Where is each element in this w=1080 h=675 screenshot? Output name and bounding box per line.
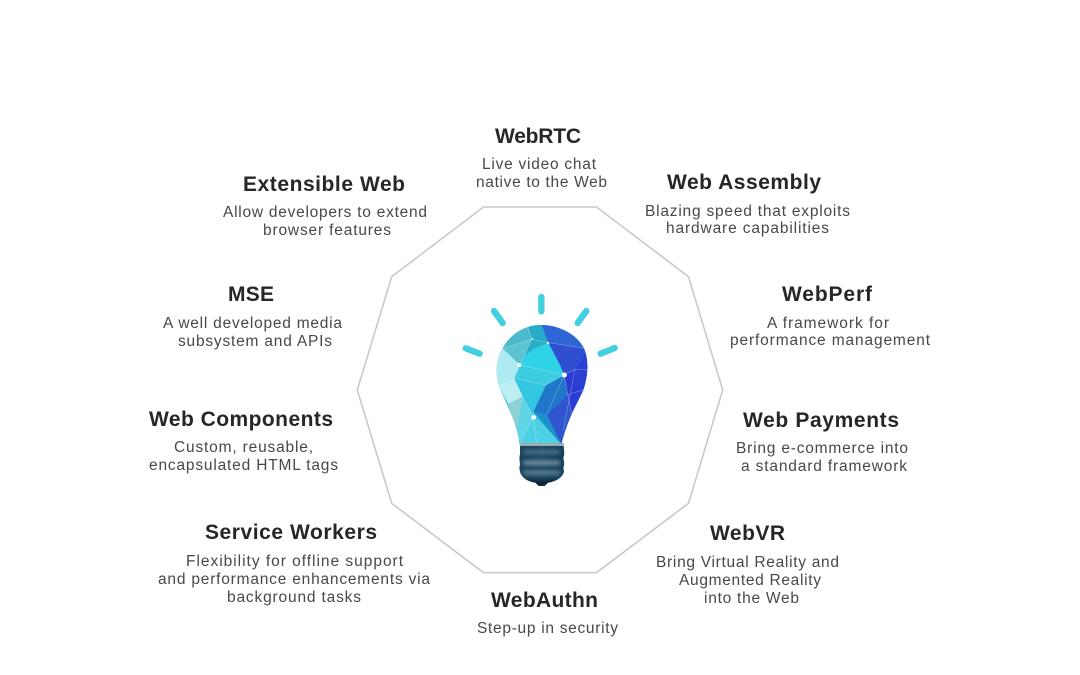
label: WebRTC: native to the Web — [476, 174, 607, 191]
icon: light bulb — [466, 297, 615, 487]
label: Service Workers — [158, 521, 430, 606]
label: WebAuthn — [477, 589, 618, 637]
label: WebVR: into the Web — [704, 590, 799, 607]
label: WebVR: Augmented Reality — [679, 572, 821, 589]
label: WebPerf: WebPerf — [782, 283, 873, 306]
label: Service Workers: Service Workers — [205, 521, 377, 544]
facet mesh lines — [503, 327, 587, 443]
label: MSE: A well developed media — [163, 315, 342, 332]
screw base — [519, 443, 564, 486]
label: WebRTC: Live video chat — [482, 156, 597, 173]
label: Web Payments: Bring e-commerce into — [736, 440, 908, 457]
label: Service Workers: background tasks — [227, 589, 361, 606]
label: WebAuthn: Step-up in security — [477, 620, 618, 637]
label: MSE: MSE — [228, 283, 274, 306]
label: Service Workers: and performance enhancements via — [158, 571, 430, 588]
label: Web Assembly — [645, 171, 850, 237]
label: WebVR: Bring Virtual Reality and — [656, 554, 839, 571]
label: Extensible Web: Extensible Web — [243, 173, 405, 196]
label: WebVR: WebVR — [710, 522, 785, 545]
label: Web Assembly: hardware capabilities — [666, 220, 829, 237]
label: Extensible Web — [223, 173, 427, 239]
label: Service Workers: Flexibility for offline support — [186, 553, 404, 570]
label: WebRTC: WebRTC — [495, 125, 581, 148]
glowing nodes — [517, 363, 521, 367]
label: WebVR — [656, 522, 839, 607]
label: MSE — [163, 283, 342, 350]
label: Web Assembly: Web Assembly — [667, 171, 821, 194]
label: Web Components: Web Components — [149, 408, 333, 431]
label: Web Payments: a standard framework — [741, 458, 907, 475]
label: Web Components: encapsulated HTML tags — [149, 457, 338, 474]
label: Web Payments: Web Payments — [743, 409, 899, 432]
bulb glass facets — [496, 325, 588, 444]
label: WebPerf: A framework for — [767, 315, 889, 332]
label: WebPerf — [730, 283, 931, 349]
label: Extensible Web: Allow developers to extend — [223, 204, 427, 221]
label: Web Components — [149, 408, 338, 474]
label: Web Payments — [736, 409, 908, 475]
label: Extensible Web: browser features — [263, 222, 391, 239]
label: Web Components: Custom, reusable, — [174, 439, 313, 456]
light rays — [466, 297, 615, 354]
label: MSE: subsystem and APIs — [178, 333, 332, 350]
decagon outline — [357, 207, 723, 573]
label: Web Assembly: Blazing speed that exploits — [645, 203, 850, 220]
label: WebRTC — [476, 125, 607, 191]
label: WebPerf: performance management — [730, 332, 931, 349]
label: WebAuthn: WebAuthn — [491, 589, 598, 612]
